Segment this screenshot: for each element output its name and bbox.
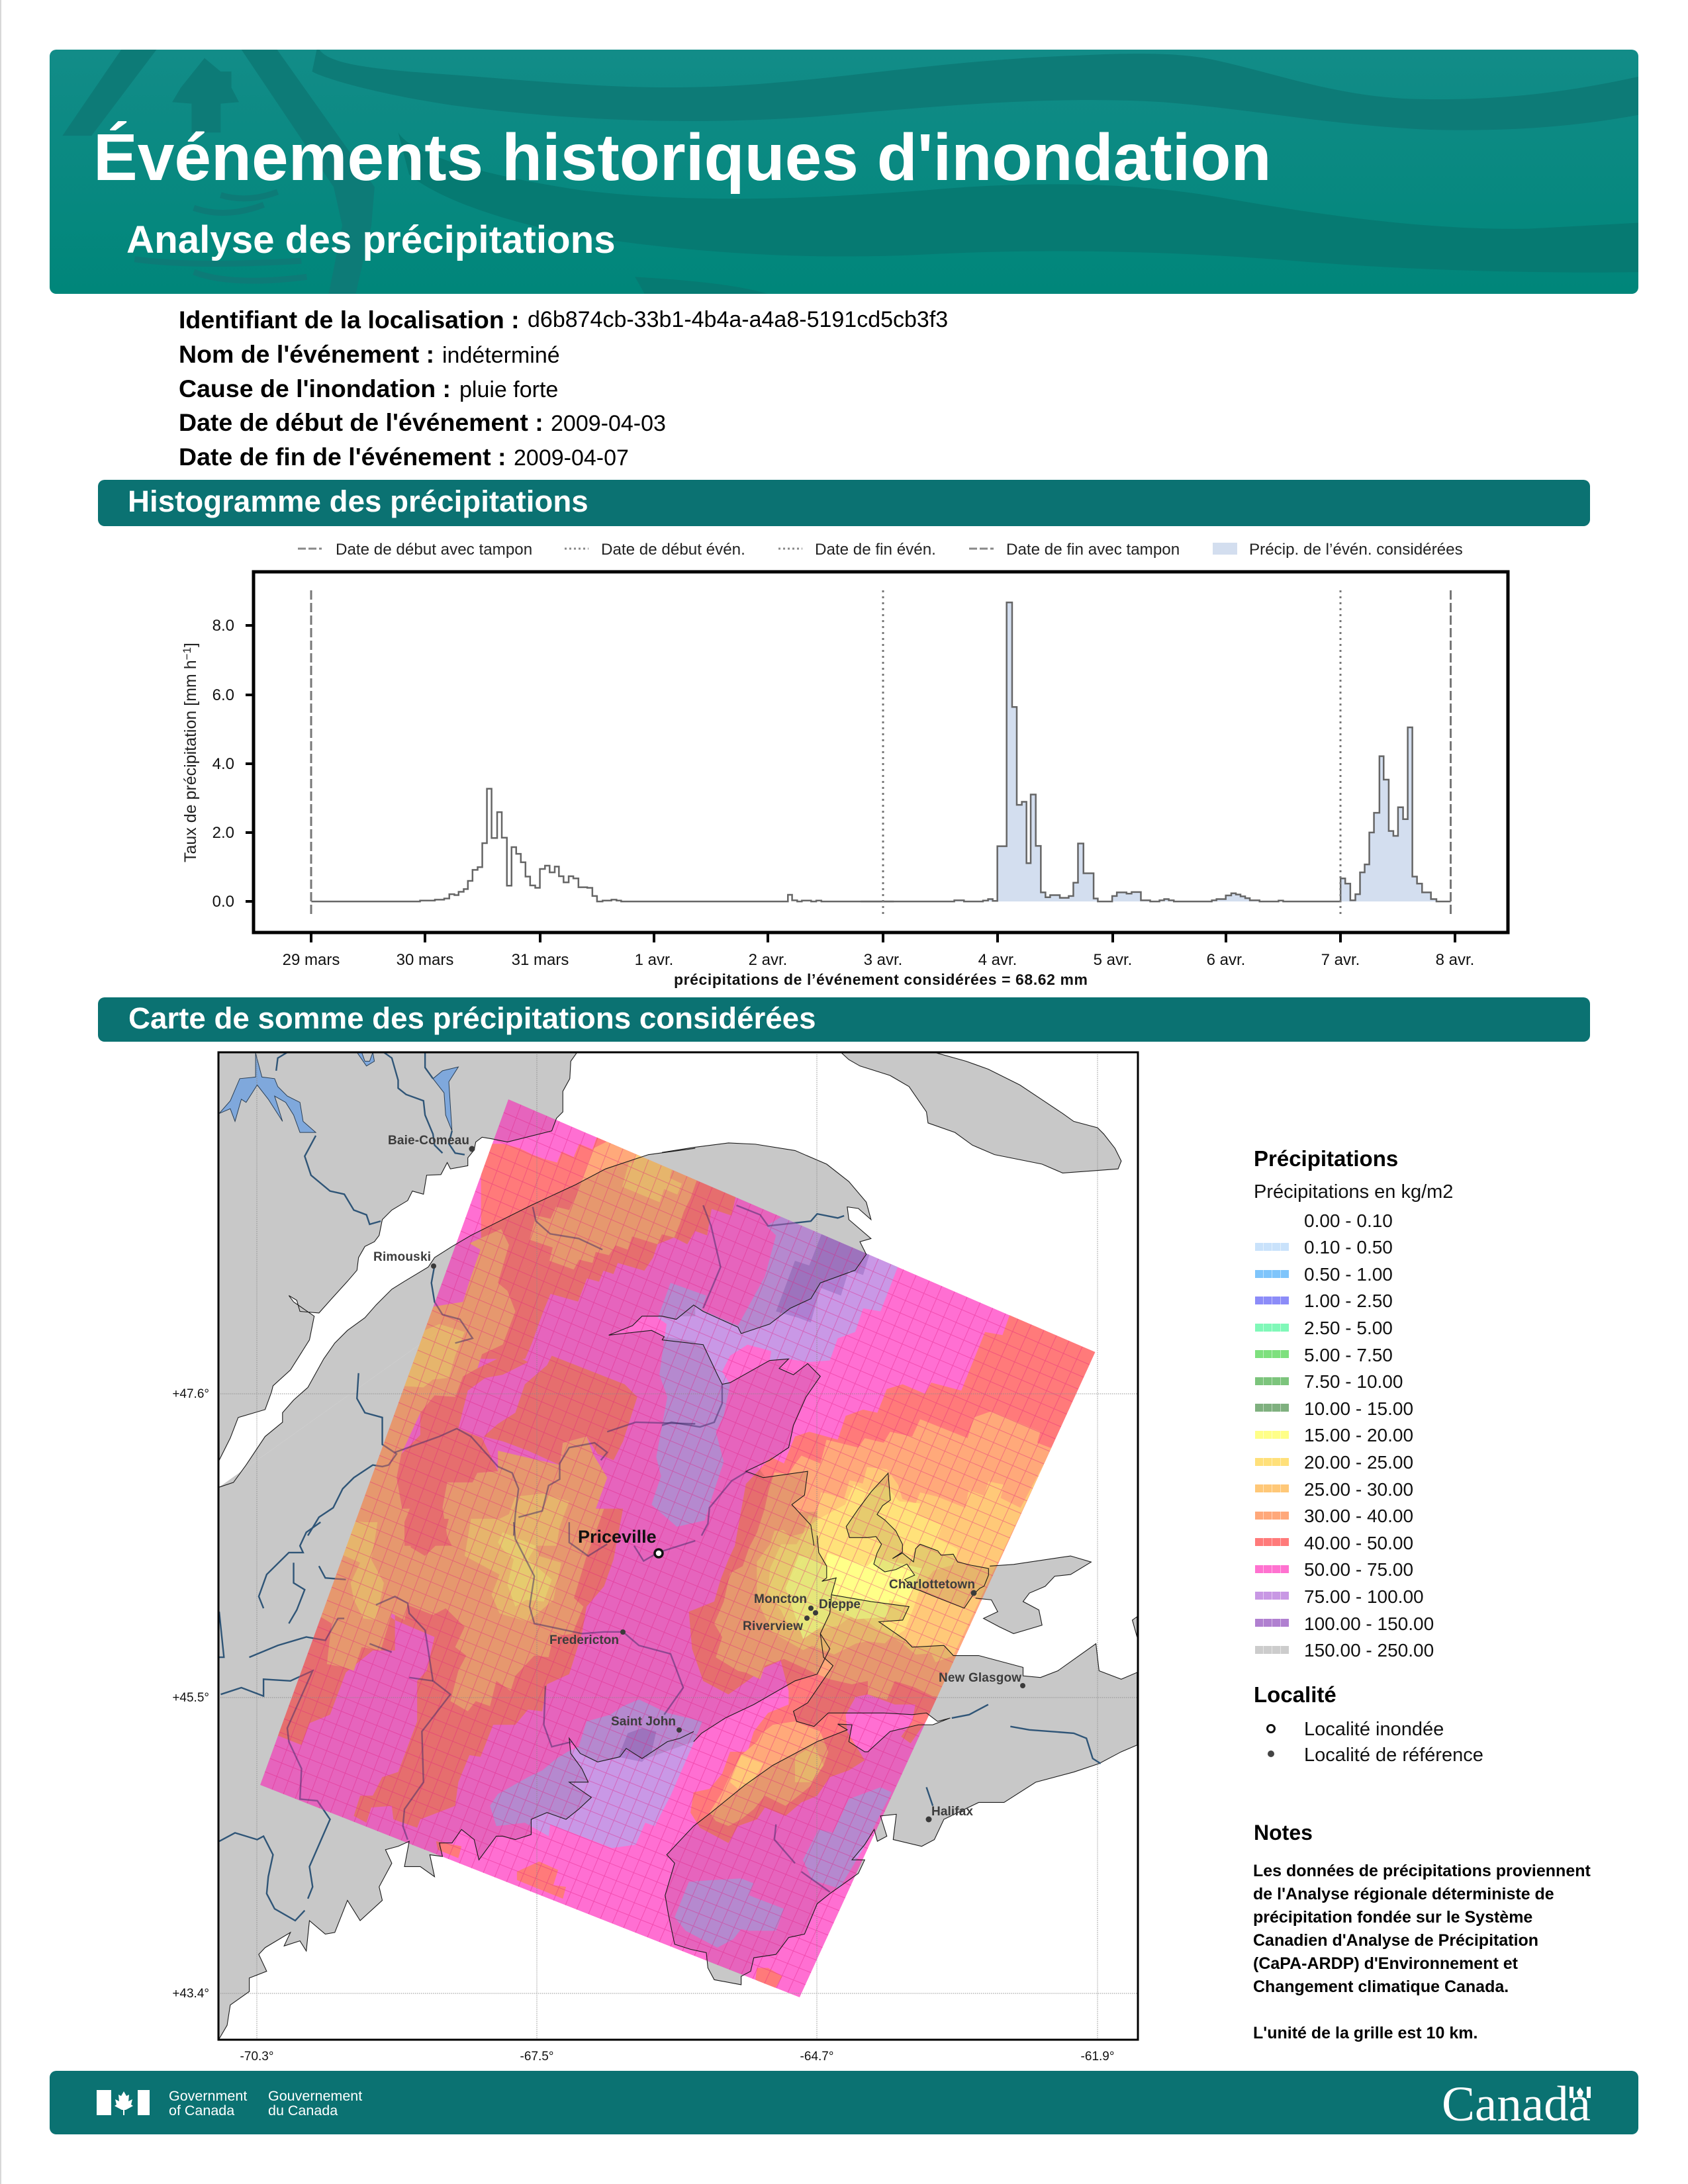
footer banner xyxy=(50,2071,1638,2134)
30-40 class regions xyxy=(320,1140,1070,1826)
notes: de l'Analyse régionale déterministe de xyxy=(1253,1885,1554,1903)
map frame xyxy=(218,1052,1138,2040)
legend heading: Précipitations xyxy=(1254,1146,1398,1171)
100-150 class regions xyxy=(618,1229,871,1762)
locality legend: Localité de référence xyxy=(1304,1745,1483,1766)
rainfall grid xyxy=(260,1099,1095,1997)
Canada wordmark: Canada xyxy=(1442,2077,1591,2132)
rivers seen through the grid xyxy=(219,1052,1101,1921)
section heading: histogram xyxy=(98,480,1590,526)
notes xyxy=(1253,1821,1591,2042)
event metadata block: d6b874cb-33b1-4b4a-a4a8-5191cd5cb3f3 xyxy=(528,307,948,332)
precipitation step line with filled event period xyxy=(311,602,1451,901)
government signature: of Canada xyxy=(169,2103,234,2118)
legend value labels: 1.00 - 2.50 xyxy=(1304,1291,1393,1311)
x axis tick labels: 8 avr. xyxy=(1436,951,1474,969)
y axis tick labels: 2.0 xyxy=(212,824,234,842)
government signature: du Canada xyxy=(268,2103,338,2118)
city labels and markers: Moncton xyxy=(754,1592,807,1606)
y axis tick labels: 4.0 xyxy=(212,755,234,773)
event metadata block xyxy=(179,306,948,471)
city labels and markers: Priceville xyxy=(578,1527,657,1547)
histogram legend: Précip. de l’évén. considérées xyxy=(1249,541,1463,559)
latitude and longitude labels: -67.5° xyxy=(520,2050,553,2064)
latitude and longitude labels xyxy=(172,1387,1114,2064)
precipitation legend: Précipitations en kg/m2 xyxy=(1254,1181,1453,1203)
government signature: Government xyxy=(169,2088,247,2104)
city labels and markers: Baie-Comeau xyxy=(388,1134,469,1148)
legend value labels: 0.50 - 1.00 xyxy=(1304,1264,1393,1285)
event metadata block: Date de début de l'événement : xyxy=(179,408,543,436)
banner background waves and house logo xyxy=(62,46,1647,296)
legend value labels: 75.00 - 100.00 xyxy=(1304,1586,1424,1607)
legend value labels: 50.00 - 75.00 xyxy=(1304,1559,1413,1580)
legend value labels xyxy=(1304,1210,1434,1661)
event metadata block: Cause de l'inondation : xyxy=(179,375,451,402)
city labels and markers: Dieppe xyxy=(819,1598,861,1612)
notes: Les données de précipitations proviennent xyxy=(1253,1862,1591,1880)
city labels and markers: Fredericton xyxy=(549,1633,619,1647)
legend value labels: 100.00 - 150.00 xyxy=(1304,1614,1434,1634)
latitude and longitude labels: +43.4° xyxy=(172,1987,209,2001)
legend value labels: 15.00 - 20.00 xyxy=(1304,1425,1413,1445)
15-20 class region xyxy=(786,1553,922,1639)
x axis tick labels: 3 avr. xyxy=(864,951,902,969)
x axis tick labels: 7 avr. xyxy=(1321,951,1360,969)
precipitation legend xyxy=(1254,1146,1453,1661)
government signature: Gouvernement xyxy=(268,2088,362,2104)
notes: (CaPA-ARDP) d'Environnement et xyxy=(1253,1954,1519,1973)
histogram legend: Date de début évén. xyxy=(601,541,745,559)
histogram legend: Date de fin avec tampon xyxy=(1006,541,1180,559)
latitude and longitude labels: -64.7° xyxy=(800,2050,833,2064)
y axis tick labels: 6.0 xyxy=(212,686,234,704)
rivers outside the grid xyxy=(219,1052,1101,1921)
histogram legend: Date de début avec tampon xyxy=(336,541,532,559)
latitude and longitude labels: -70.3° xyxy=(240,2050,273,2064)
legend colour swatches xyxy=(1255,1243,1289,1654)
notes: Changement climatique Canada. xyxy=(1253,1978,1509,1996)
title: Événements historiques d'inondation xyxy=(93,120,1272,195)
city labels and markers: Rimouski xyxy=(373,1250,431,1264)
coastline outlines xyxy=(218,1052,1137,2039)
25-30 class regions xyxy=(341,1150,1048,1789)
legend value labels: 40.00 - 50.00 xyxy=(1304,1533,1413,1553)
city labels and markers: Charlottetown xyxy=(889,1578,975,1592)
x axis tick labels: 5 avr. xyxy=(1094,951,1132,969)
small 40-50 patches inside the west blob xyxy=(404,1498,452,1556)
legend value labels: 10.00 - 15.00 xyxy=(1304,1398,1413,1419)
legend value labels: 0.00 - 0.10 xyxy=(1304,1210,1393,1231)
histogram legend: Date de fin évén. xyxy=(815,541,936,559)
event metadata block: Date de fin de l'événement : xyxy=(179,443,506,471)
40-50 class regions xyxy=(276,1134,1096,1990)
y axis title: −1 xyxy=(181,647,193,660)
histogram legend xyxy=(298,541,1463,559)
legend value labels: 25.00 - 30.00 xyxy=(1304,1479,1413,1500)
event metadata block: 2009-04-07 xyxy=(514,445,629,471)
land base xyxy=(218,1052,1137,2039)
darken cells over land xyxy=(260,1099,997,1975)
city labels and markers: Halifax xyxy=(931,1805,973,1819)
city labels and markers: Riverview xyxy=(743,1619,803,1633)
section heading: map: Carte de somme des précipitations considérées xyxy=(128,1001,816,1035)
event metadata block: indéterminé xyxy=(442,343,560,368)
icon: Canadian flag xyxy=(97,2090,150,2115)
event metadata block: 2009-04-03 xyxy=(551,411,666,436)
y axis title: ] xyxy=(181,643,200,647)
event metadata block: Nom de l'événement : xyxy=(179,340,434,368)
y axis tick labels: 8.0 xyxy=(212,617,234,635)
grid cell lines xyxy=(265,1105,1090,1993)
legend value labels: 30.00 - 40.00 xyxy=(1304,1506,1413,1526)
locality legend: Localité xyxy=(1254,1682,1336,1707)
date marker lines xyxy=(311,590,1451,917)
event total label: précipitations de l’événement considérées = 68.62 mm xyxy=(674,971,1088,988)
x axis tick labels: 2 avr. xyxy=(749,951,787,969)
y axis tick labels xyxy=(212,617,234,911)
20-25 class regions xyxy=(498,1484,958,1637)
x axis tick labels: 6 avr. xyxy=(1207,951,1245,969)
event metadata block: Identifiant de la localisation : xyxy=(179,306,520,334)
notes: L'unité de la grille est 10 km. xyxy=(1253,2024,1477,2042)
event metadata block: pluie forte xyxy=(459,377,558,402)
legend value labels: 150.00 - 250.00 xyxy=(1304,1640,1434,1661)
x axis tick labels: 29 mars xyxy=(283,951,340,969)
x axis tick labels: 31 mars xyxy=(512,951,569,969)
histogram chart xyxy=(181,572,1508,988)
legend value labels: 7.50 - 10.00 xyxy=(1304,1371,1403,1392)
lakes xyxy=(219,1052,458,1701)
section heading: map xyxy=(98,997,1590,1042)
latitude and longitude labels: +47.6° xyxy=(172,1387,209,1401)
y axis tick labels: 0.0 xyxy=(212,893,234,911)
latitude and longitude labels: +45.5° xyxy=(172,1691,209,1705)
city labels and markers: New Glasgow xyxy=(939,1671,1021,1685)
75-100 class regions xyxy=(490,1213,900,1948)
header banner xyxy=(50,46,1647,296)
x axis tick labels xyxy=(283,951,1474,969)
notes: Notes xyxy=(1254,1821,1313,1844)
locality legend xyxy=(1254,1682,1483,1766)
legend value labels: 2.50 - 5.00 xyxy=(1304,1318,1393,1338)
latitude and longitude labels: -61.9° xyxy=(1081,2050,1114,2064)
city labels and markers: Saint John xyxy=(611,1715,676,1729)
x axis tick labels: 30 mars xyxy=(397,951,453,969)
y axis title: Taux de précipitation [mm h xyxy=(181,660,200,862)
government signature xyxy=(169,2088,362,2118)
graticule xyxy=(218,1052,1138,2040)
x axis tick labels: 1 avr. xyxy=(635,951,673,969)
legend value labels: 5.00 - 7.50 xyxy=(1304,1345,1393,1365)
locality legend: Localité inondée xyxy=(1304,1719,1444,1740)
notes: Canadien d'Analyse de Précipitation xyxy=(1253,1931,1538,1950)
notes: précipitation fondée sur le Système xyxy=(1253,1908,1532,1927)
x axis tick labels: 4 avr. xyxy=(978,951,1017,969)
subtitle: Analyse des précipitations xyxy=(126,218,616,261)
city labels and markers xyxy=(373,1134,1025,1823)
legend value labels: 0.10 - 0.50 xyxy=(1304,1237,1393,1257)
section heading: histogram: Histogramme des précipitations xyxy=(128,484,588,518)
precipitation map xyxy=(172,1052,1138,2064)
legend value labels: 20.00 - 25.00 xyxy=(1304,1452,1413,1473)
